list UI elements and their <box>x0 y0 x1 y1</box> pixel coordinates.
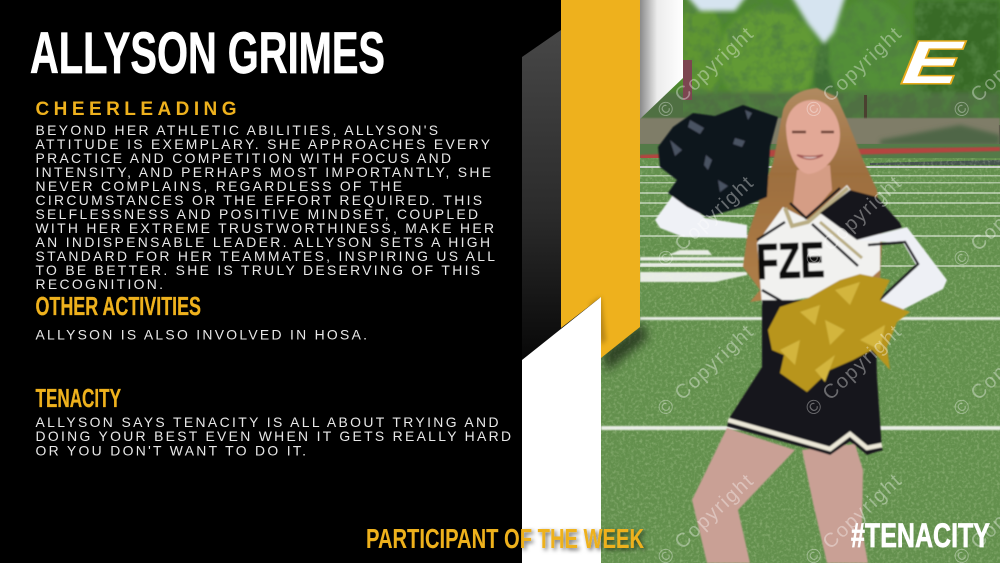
shape: white lower ribbon <box>522 297 601 563</box>
text block: cheerleading description: RECOGNITION. <box>36 276 163 292</box>
text block: cheerleading description: PRACTICE AND COMPETITION WITH FOCUS AND <box>36 150 451 166</box>
black shoulder <box>820 190 902 240</box>
text block: cheerleading description: STANDARD FOR HER TEAMMATES, INSPIRING US ALL <box>36 248 495 264</box>
text block: tenacity description: ALLYSON SAYS TENACITY IS ALL ABOUT TRYING AND <box>36 414 498 430</box>
pom-pom gold shards <box>780 282 885 382</box>
gold pom-pom <box>768 274 910 392</box>
text block: cheerleading description: AN INDISPENSABLE LEADER. ALLYSON SETS A HIGH <box>36 234 490 250</box>
title: ALLYSON GRIMES <box>30 21 385 86</box>
raised arm sleeve <box>655 195 747 238</box>
watermarks: © Copyright <box>653 321 758 421</box>
photo background: sky, trees, track and field <box>600 0 1000 563</box>
watermarks: © Copyright <box>801 172 906 272</box>
sleeve stripes <box>856 242 918 322</box>
text block: cheerleading description: WITH HER EXTREME TRUSTWORTHINESS, MAKE HER <box>36 220 494 236</box>
text block: cheerleading description: TO BE BETTER. SHE IS TRULY DESERVING OF THIS <box>36 262 480 278</box>
shirt lettering: FZE <box>755 232 825 290</box>
face <box>786 100 840 174</box>
photo: cheerleader on football field <box>600 0 1000 563</box>
shadow on yellow ribbon <box>590 297 606 345</box>
heading: cheerleading: CHEERLEADING <box>36 99 236 120</box>
text block: cheerleading description <box>36 122 495 292</box>
watermarks: © Copyright <box>801 23 906 123</box>
text block: cheerleading description: ATTITUDE IS EXEMPLARY. SHE APPROACHES EVERY <box>36 136 490 152</box>
watermarks: © Copyright <box>653 23 758 123</box>
text block: tenacity description: DOING YOUR BEST EVEN WHEN IT GETS REALLY HARD <box>36 428 511 444</box>
shape: yellow ribbon <box>561 0 640 358</box>
neck <box>793 165 832 218</box>
text block: cheerleading description: BEYOND HER ATHLETIC ABILITIES, ALLYSON'S <box>36 122 438 138</box>
facial features <box>792 132 834 159</box>
watermarks: © Copyright <box>801 321 906 421</box>
white sleeve <box>853 227 947 328</box>
legs <box>692 428 868 563</box>
text block: cheerleading description: SELFLESSNESS AND POSITIVE MINDSET, COUPLED <box>36 206 478 222</box>
text block: tenacity description: OR YOU DON'T WANT TO DO IT. <box>36 442 306 458</box>
watermarks <box>653 23 1000 563</box>
heading: other activities: OTHER ACTIVITIES <box>36 291 201 321</box>
person: cheerleader <box>655 88 947 563</box>
heading: tenacity: TENACITY <box>36 383 121 413</box>
hair <box>743 88 882 302</box>
bodice collar and stripes <box>757 188 862 306</box>
uniform bodice <box>757 185 880 305</box>
text block: cheerleading description: CIRCUMSTANCES OR THE EFFORT REQUIRED. THIS <box>36 192 482 208</box>
pom-pom highlights <box>670 110 752 192</box>
skirt trim <box>728 420 882 451</box>
shape: dark gradient ribbon <box>522 30 561 362</box>
panel: black background <box>0 0 561 563</box>
watermarks: © Copyright <box>653 172 758 272</box>
text block: cheerleading description: NEVER COMPLAINS, REGARDLESS OF THE <box>36 178 402 194</box>
shadow under yellow ribbon <box>603 322 648 372</box>
label: participant of the week: PARTICIPANT OF THE WEEK <box>366 523 644 554</box>
black pom-pom <box>658 105 778 217</box>
text block: tenacity description <box>36 414 511 458</box>
shape: white top ribbon <box>640 0 683 119</box>
text block: other activities: ALLYSON IS ALSO INVOLVED IN HOSA. <box>36 326 367 342</box>
text block: cheerleading description: INTENSITY, AND PERHAPS MOST IMPORTANTLY, SHE <box>36 164 491 180</box>
skirt and torso <box>727 300 882 455</box>
icon: E logo: E <box>892 29 975 96</box>
